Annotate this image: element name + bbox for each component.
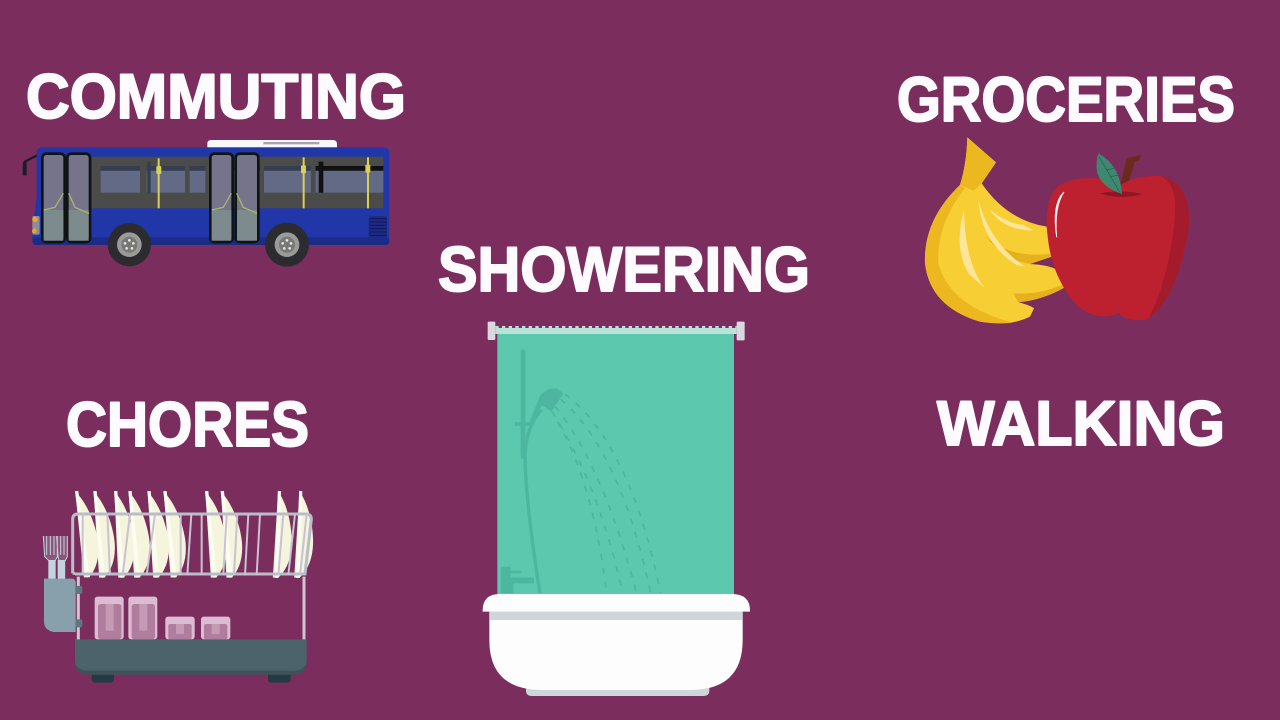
apple leaf xyxy=(1097,153,1122,194)
tub rim xyxy=(483,594,750,612)
icon: shower and bathtub xyxy=(483,322,750,696)
drip tray xyxy=(75,639,307,675)
bus body xyxy=(32,147,389,245)
rack wires xyxy=(73,514,311,574)
rack feet xyxy=(92,670,114,683)
tub body xyxy=(489,612,743,690)
heading: chores: CHORES xyxy=(66,390,309,460)
heading: commuting: COMMUTING xyxy=(26,62,406,132)
bus headlight xyxy=(32,216,40,235)
bus yellow poles xyxy=(156,157,370,208)
tub base xyxy=(526,685,709,696)
curtain rod xyxy=(495,327,737,334)
tub shadow band xyxy=(489,612,743,620)
banana bunch xyxy=(925,137,1066,323)
heading: groceries: GROCERIES xyxy=(897,65,1235,135)
icon: dish rack xyxy=(43,490,319,683)
faucet xyxy=(501,567,534,593)
heading: showering: SHOWERING xyxy=(438,235,810,305)
glasses xyxy=(95,597,230,639)
rack frame back xyxy=(78,577,304,640)
bus window band xyxy=(92,157,383,208)
shower rail and hose xyxy=(515,352,542,593)
bus front door xyxy=(42,154,90,242)
fork holder with forks xyxy=(43,536,82,632)
bus wheels xyxy=(108,223,309,267)
shower head xyxy=(528,388,563,425)
bus middle door xyxy=(210,154,258,242)
bus rear vent xyxy=(369,216,387,240)
icon: bus xyxy=(23,140,389,267)
bus mirror xyxy=(23,154,37,175)
bus roof unit xyxy=(207,140,337,147)
heading: walking: WALKING xyxy=(937,389,1225,459)
shower curtain xyxy=(497,331,734,595)
apple highlight xyxy=(1055,192,1064,237)
apple body xyxy=(1047,176,1189,320)
water spray xyxy=(552,394,661,593)
plates xyxy=(75,490,319,579)
icon: bananas and apple xyxy=(925,137,1189,323)
apple stem xyxy=(1118,155,1141,195)
rod brackets xyxy=(488,322,495,340)
